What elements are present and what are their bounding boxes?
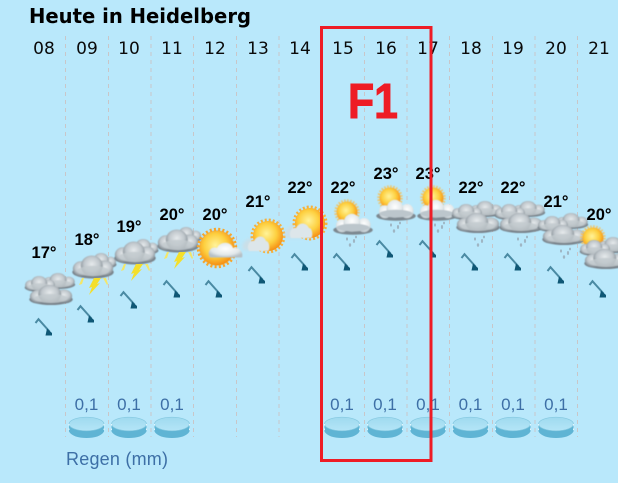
rain amounts: 0,1 [373,395,397,414]
icon: thunderstorm 09 [72,253,116,295]
icon: sun, cloud and rain 15 [333,200,373,247]
rain amounts: 0,1 [330,395,354,414]
hour labels: 09 [76,39,98,59]
hour labels: 14 [289,39,311,59]
icon: thunderstorm 11 [157,227,201,269]
rain amounts: 0,1 [544,395,568,414]
icon: sun with pale cloud 14 [285,207,326,239]
wind arrows [36,241,606,336]
icon: sun with cloud 12 [198,230,242,266]
weather icons [25,186,618,305]
hour labels: 10 [118,39,140,59]
temperature labels: 22° [331,179,355,197]
icon: sun, cloud and rain 17 [417,186,457,233]
rain axis label: Regen (mm) [66,449,168,469]
temperature labels: 18° [75,231,99,249]
icon: thunderstorm 10 [114,239,158,281]
hour labels: 08 [33,39,55,59]
icon: cloud and rain 19 [495,201,545,247]
hour labels: 18 [460,39,482,59]
temperature labels: 20° [587,206,611,224]
temperature labels: 20° [160,206,184,224]
rain amounts: 0,1 [459,395,482,414]
rain amounts: 0,1 [75,395,98,414]
hour labels: 19 [502,39,524,59]
rain amounts [75,395,568,414]
temperature labels: 19° [117,218,141,236]
temperature labels: 22° [501,179,525,197]
title: Heute in Heidelberg [29,4,251,28]
icon: cloud and rain 18 [452,201,502,247]
rain discs [69,417,574,438]
hour labels: 16 [375,39,397,59]
F1 label: F1 [348,75,398,129]
hour labels: 13 [247,39,269,59]
hour labels: 11 [161,39,183,59]
temperature labels: 23° [416,165,440,183]
icon: cloud 08 [25,273,75,305]
temperature labels: 23° [374,165,398,183]
temperature labels: 17° [32,244,56,262]
temperature labels: 21° [246,193,270,211]
hour labels: 20 [545,39,567,59]
rain amounts: 0,1 [416,395,440,414]
temperature labels: 22° [288,179,312,197]
hour labels: 12 [204,39,226,59]
hour labels [33,39,610,59]
rain amounts: 0,1 [501,395,525,414]
highlight box F1 [322,28,431,460]
icon: sun with pale cloud 13 [242,220,284,252]
icon: sun behind cloud 21 [580,226,618,269]
hour labels: 15 [332,39,354,59]
temperature labels: 21° [544,193,568,211]
temperature labels [32,165,611,262]
rain amounts: 0,1 [117,395,141,414]
icon: cloud and rain 20 [538,213,588,259]
icon: sun, cloud and rain 16 [376,186,416,233]
rain amounts: 0,1 [160,395,184,414]
temperature labels: 20° [203,206,227,224]
hour labels: 21 [588,39,610,59]
hour labels: 17 [417,39,439,59]
temperature labels: 22° [459,179,483,197]
